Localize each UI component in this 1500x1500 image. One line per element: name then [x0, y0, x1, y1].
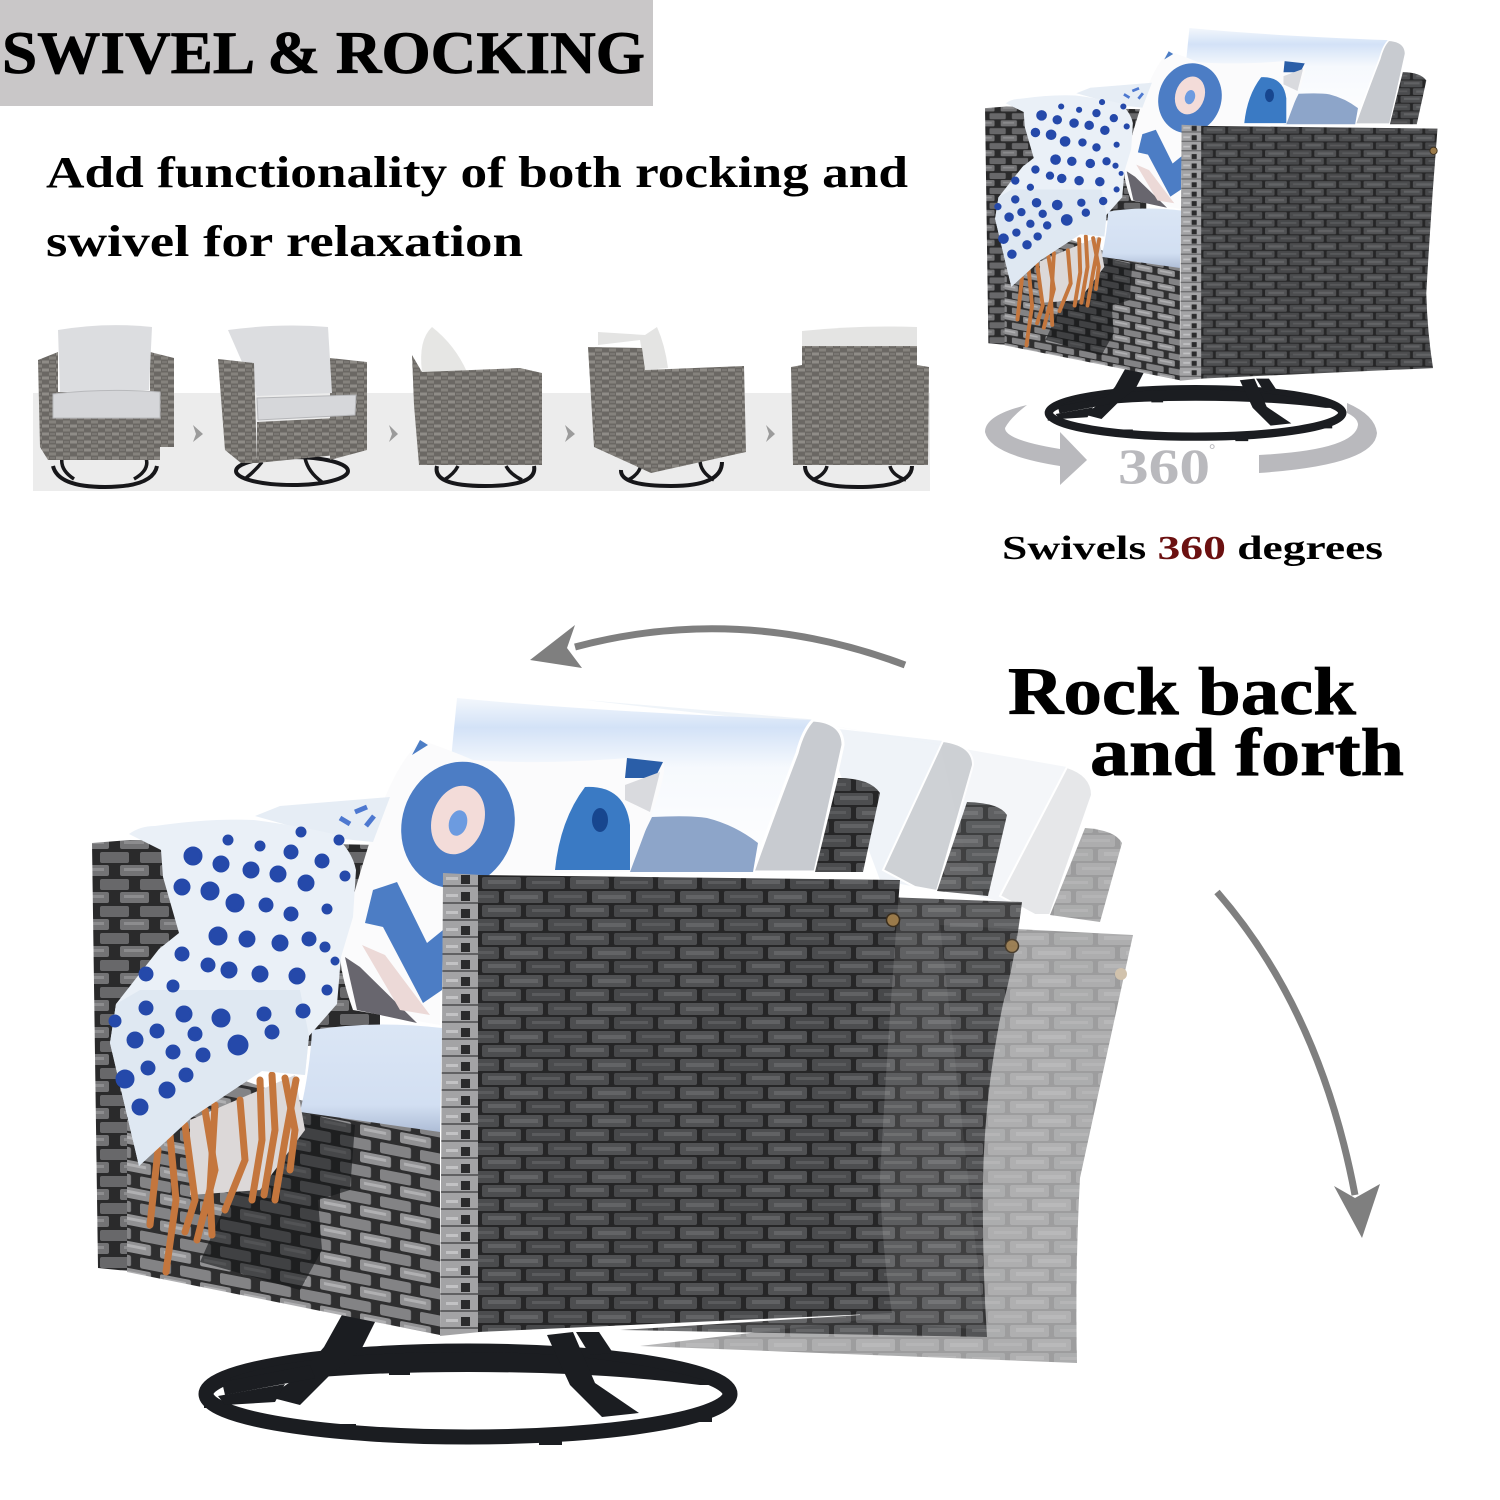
- chair view: three quarter back: [588, 327, 746, 486]
- inner left wall and post: [92, 840, 380, 1272]
- top right chair photo with swivel: [985, 28, 1438, 441]
- ghost chair: mid rocked position: [585, 700, 1022, 1337]
- heading: rock back and forth: [1008, 653, 1404, 790]
- heading: rock back and forth: and forth: [1090, 714, 1404, 790]
- intro text block: Add functionality of both rocking and: [46, 148, 908, 197]
- chair view: back: [791, 326, 929, 487]
- icon: chevron arrows between views: [193, 425, 775, 442]
- chair view: three quarter front: [218, 326, 367, 485]
- ghost chair: faint rocked position: [640, 705, 1133, 1363]
- arrow: rock backward: [530, 625, 905, 668]
- throw blanket: [110, 797, 390, 1272]
- caption: swivels 360 degrees: Swivels 360 degrees: [1002, 530, 1383, 567]
- heading: rock back and forth: Rock back: [1008, 653, 1356, 729]
- main chair photo illustration: [92, 698, 900, 1445]
- arrow: rock forward: [1217, 892, 1380, 1238]
- 360 degree label: 360: [1118, 438, 1210, 494]
- icon: 360 rotation arrow right: [1259, 403, 1377, 473]
- title banner: SWIVEL & ROCKING: [2, 20, 645, 86]
- seat cushion: [300, 1024, 442, 1132]
- panel: five rotation views of the chair: [33, 325, 930, 491]
- chair view: front: [38, 325, 174, 487]
- degree mark: °: [1209, 442, 1215, 459]
- back cushion: [440, 698, 843, 872]
- lower side panel: [127, 1040, 440, 1335]
- decorative pillow: [340, 740, 664, 1025]
- rear arm frame: [815, 778, 880, 872]
- intro text block: swivel for relaxation: [46, 217, 523, 266]
- icon: 360 rotation arrow left: [985, 405, 1087, 485]
- intro text block: [46, 148, 908, 266]
- front arm panel: [478, 875, 900, 1332]
- corner strip of wicker: [440, 873, 482, 1336]
- chair view: side: [412, 327, 542, 486]
- chair swivel base: [204, 1313, 730, 1445]
- title banner: [0, 0, 653, 106]
